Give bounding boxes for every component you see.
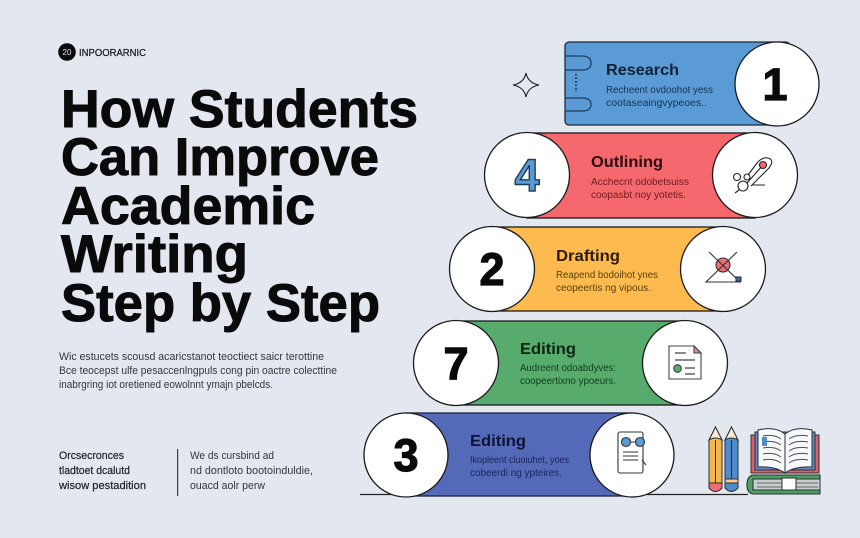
title: Can Improve — [61, 128, 379, 187]
icon: document checklist — [669, 346, 701, 379]
step: research: cootaseaingvypeoes.. — [606, 98, 707, 109]
step: drafting — [450, 226, 766, 312]
illustration: pencils and books — [709, 427, 820, 494]
step: editing blue — [364, 413, 674, 497]
step: research — [565, 42, 819, 126]
step: editing blue: Editing — [470, 433, 526, 450]
step: drafting: ceopeertis ng vipous. — [556, 283, 651, 294]
brand logo: 20 — [63, 48, 72, 57]
baseline rule — [360, 494, 748, 496]
step: drafting: 2 — [479, 244, 505, 295]
step: outlining: Acchecnt odobetsuiss — [591, 177, 689, 188]
step: research: Research — [606, 62, 679, 79]
step: editing green: 7 — [443, 338, 469, 389]
bottom right note: We ds cursbind ad — [190, 450, 274, 462]
icon: ruler tabs — [565, 56, 591, 111]
step: editing green: Audreent odoabdyves: — [520, 363, 616, 374]
step: editing green: coopeertixno ypoeurs. — [520, 376, 616, 387]
step: editing green — [414, 320, 728, 406]
title: Writing — [61, 225, 248, 284]
icon: stacked books — [747, 432, 820, 494]
brand logo — [58, 43, 146, 61]
brand logo: INPOORARNIC — [79, 47, 146, 59]
step: outlining: 4 — [514, 150, 540, 201]
bottom right note — [190, 450, 313, 492]
step: research: 1 — [762, 59, 788, 110]
icon: document with glasses — [618, 432, 646, 473]
icon: open book — [758, 429, 812, 473]
step: editing blue: Ikopleent cluoiuhet, yoes — [470, 455, 569, 466]
bottom left note: wisow pestadition — [58, 480, 146, 492]
bottom left note — [58, 450, 146, 492]
title: Academic — [61, 177, 315, 236]
title: Step by Step — [61, 274, 380, 333]
step: editing blue: 3 — [393, 430, 419, 481]
step: editing blue: cobeerdi ng ypteires. — [470, 468, 562, 479]
intro paragraph: inabrgring iot oretiened eowolnnt ymajn pbelcds. — [59, 379, 273, 391]
icon: yellow pencil — [709, 427, 722, 492]
title: How Students — [61, 80, 418, 139]
icon: blue pencil — [725, 427, 738, 492]
intro paragraph — [59, 351, 337, 391]
intro paragraph: Bce teocepst ulfe pesaccenlngpuls cong pin oactre colecttine — [59, 365, 337, 377]
icon: drafting compass — [706, 252, 741, 282]
icon: sparkle — [513, 73, 539, 97]
step: drafting: Drafting — [556, 248, 620, 265]
bottom left note: Orcsecronces — [59, 450, 124, 462]
title — [61, 80, 418, 333]
step: editing green: Editing — [520, 341, 576, 358]
step: drafting: Reapend bodoihot ynes — [556, 270, 658, 281]
bottom right note: ouacd aolr perw — [190, 480, 265, 492]
step: outlining — [484, 132, 798, 218]
step: outlining: coopasbt noy yotetis. — [591, 190, 686, 201]
bottom divider — [177, 449, 178, 496]
bottom right note: nd dontloto bootoinduldie, — [190, 465, 313, 477]
step: research: Recheent ovdoohot yess — [606, 85, 713, 96]
intro paragraph: Wic estucets scousd acaricstanot teoctiect saicr terottine — [59, 351, 324, 363]
icon: outlining tool — [734, 158, 772, 193]
bottom left note: tladtoet dcalutd — [59, 465, 130, 477]
step: outlining: Outlining — [591, 154, 663, 171]
